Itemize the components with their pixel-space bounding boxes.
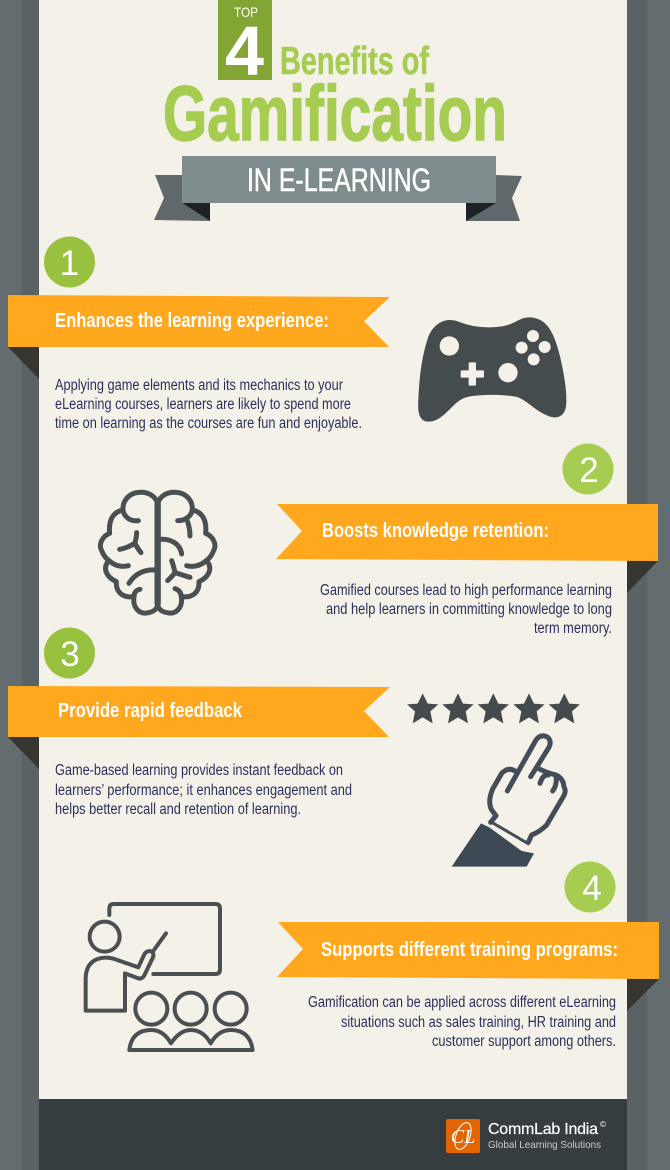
number badge 2: 2 xyxy=(579,451,599,490)
banner: boosts knowledge retention: Boosts knowledge retention: xyxy=(322,520,549,542)
number badge 2 xyxy=(562,444,614,494)
company name: CommLab India xyxy=(488,1121,598,1138)
body text 3: Game-based learning provides instant feedback on xyxy=(55,762,343,779)
number badge 4 xyxy=(564,862,616,912)
number badge 4: 4 xyxy=(582,869,602,908)
heading: gamification: Gamification xyxy=(163,69,507,157)
number badge 3: 3 xyxy=(60,635,80,674)
banner: supports different training programs: Supports different training programs: xyxy=(321,939,618,961)
tagline: Global Learning Solutions xyxy=(488,1139,601,1151)
body text 1: Applying game elements and its mechanics to your xyxy=(55,377,343,394)
icon: five stars xyxy=(407,693,580,723)
banner: enhances the learning experience: Enhances the learning experience: xyxy=(55,310,329,332)
banner: boosts knowledge retention xyxy=(276,504,658,593)
body text 2: Gamified courses lead to high performance learning xyxy=(320,582,612,599)
panel: benefit 1 xyxy=(8,236,566,432)
panel: benefit 2 xyxy=(100,444,658,637)
copyright mark: © xyxy=(600,1120,606,1129)
body text 1: eLearning courses, learners are likely to spend more xyxy=(55,396,351,413)
number badge 1: 1 xyxy=(60,244,79,283)
ribbon: in e-learning xyxy=(154,156,522,221)
body text 3: learners’ performance; it enhances engagement and xyxy=(55,782,352,799)
panel: benefit 4 xyxy=(86,862,659,1050)
title xyxy=(163,0,507,157)
number badge 1 xyxy=(44,236,95,288)
icon: game controller xyxy=(418,317,566,422)
body text 2 xyxy=(320,582,612,637)
logo: commlab india xyxy=(446,1119,606,1153)
number badge 3 xyxy=(44,628,95,678)
logo mark: CL xyxy=(451,1126,475,1148)
banner: provide rapid feedback: Provide rapid feedback xyxy=(58,700,243,722)
top 4 badge xyxy=(218,0,272,90)
logo mark xyxy=(446,1119,480,1153)
body text 3: helps better recall and retention of learning. xyxy=(55,801,301,818)
banner: supports different training programs xyxy=(277,922,659,1011)
icon: teacher and students xyxy=(86,904,253,1050)
body text 1 xyxy=(55,377,362,432)
body text 2: and help learners in committing knowledge to long xyxy=(326,601,612,618)
body text 4: customer support among others. xyxy=(432,1033,616,1050)
body text 3 xyxy=(55,762,352,818)
footer bar xyxy=(39,1099,627,1170)
banner: enhances the learning experience xyxy=(8,295,390,379)
body text 1: time on learning as the courses are fun and enjoyable. xyxy=(55,415,362,432)
heading: benefits of: Benefits of xyxy=(280,40,430,83)
icon: pointing hand xyxy=(452,736,565,867)
body text 4: situations such as sales training, HR training and xyxy=(341,1014,616,1031)
icon: brain xyxy=(100,492,215,613)
panel: benefit 3 xyxy=(8,628,580,867)
banner: provide rapid feedback xyxy=(8,686,390,769)
top 4 badge: TOP xyxy=(234,4,258,20)
body text 4 xyxy=(308,994,616,1050)
ribbon: in e-learning: IN E-LEARNING xyxy=(247,162,431,198)
body text 2: term memory. xyxy=(534,620,612,637)
top 4 badge: 4 xyxy=(225,12,264,90)
